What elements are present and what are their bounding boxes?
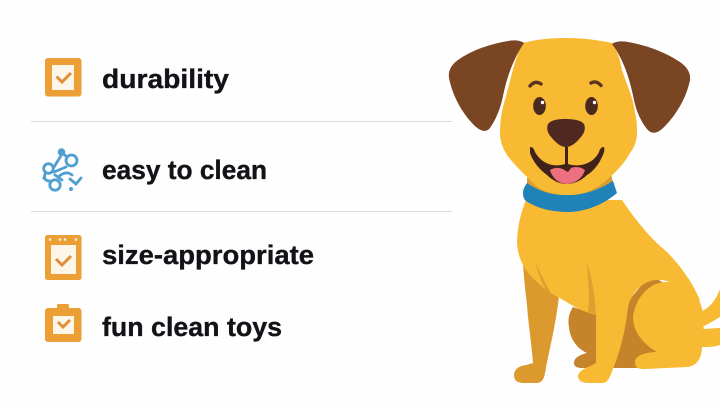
dog shaded belly and rear foot [568,275,676,368]
icon: easy to clean [42,148,81,191]
label: durability: durability [102,64,229,94]
dog tongue [550,167,585,184]
dog collar shadow [527,174,614,196]
dog body and front leg [517,200,700,383]
label: fun clean toys: fun clean toys [102,312,282,342]
icon: fun clean toys clipboard [45,304,82,342]
dog haunch [633,278,704,369]
dog far front leg [514,262,559,383]
dog eyebrows [530,82,601,86]
dog eyes [533,97,598,115]
dog chest fold shading [535,262,596,315]
icon: size-appropriate checklist [45,235,82,280]
dog collar [523,181,617,212]
illustration: sitting dog [449,38,720,383]
label: easy to clean: easy to clean [102,155,267,185]
dog head [500,38,637,195]
dog left ear [449,40,524,131]
dog tail [700,289,720,347]
icon: durability checkbox [45,58,82,96]
dog mouth [530,147,604,184]
dog right ear [612,41,690,133]
label: size-appropriate: size-appropriate [102,240,314,270]
dog nose [547,119,585,147]
